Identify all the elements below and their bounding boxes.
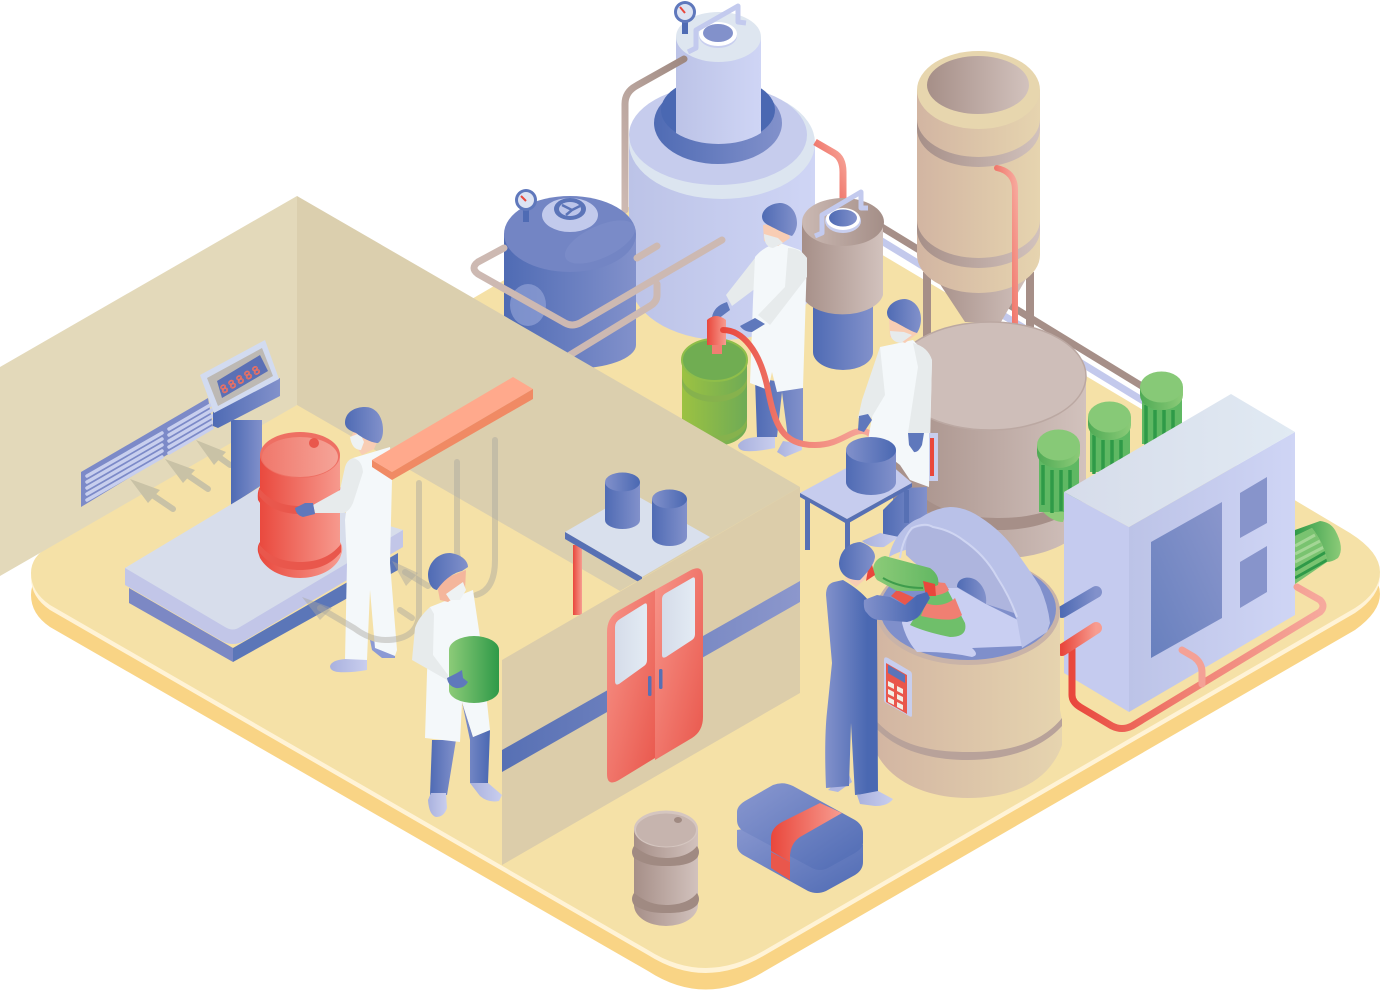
back arm bbox=[726, 258, 760, 306]
lower blue cylinder bbox=[813, 290, 873, 370]
brown body bbox=[802, 222, 883, 314]
shoe bbox=[857, 791, 893, 806]
floor pipework bbox=[1062, 587, 1323, 728]
tank body bbox=[629, 143, 815, 340]
big window bbox=[1151, 502, 1222, 658]
bench with blue cylinder bbox=[800, 437, 912, 552]
right face bbox=[1129, 432, 1295, 712]
tank top bbox=[629, 85, 807, 185]
silo legs bbox=[923, 272, 1034, 344]
display bbox=[200, 340, 279, 413]
head bbox=[762, 203, 797, 248]
worker pumping bbox=[707, 203, 873, 457]
front wall bbox=[502, 487, 800, 865]
back arm bbox=[858, 347, 885, 420]
blue tank bbox=[504, 189, 641, 369]
left leaf bbox=[607, 590, 655, 782]
coat bbox=[425, 590, 490, 742]
head bbox=[839, 542, 875, 587]
green container bbox=[449, 636, 499, 703]
hatch bbox=[825, 209, 861, 233]
scale head bbox=[213, 378, 280, 428]
shoe bbox=[330, 659, 367, 672]
upper green bbox=[873, 556, 938, 591]
red inlet pipe bbox=[1062, 628, 1096, 650]
knot bbox=[923, 581, 936, 596]
pipes behind tanks bbox=[880, 226, 1145, 402]
worker with drum bbox=[295, 407, 397, 672]
main hot pipe bbox=[1072, 587, 1323, 728]
glove bbox=[295, 503, 315, 517]
legs bbox=[755, 378, 803, 443]
control keypad bbox=[884, 657, 912, 717]
wall panel bbox=[929, 433, 938, 481]
upper cylinder bbox=[676, 37, 761, 144]
ghost pipes on wall bbox=[302, 440, 495, 640]
suit bbox=[345, 447, 397, 660]
door bbox=[607, 568, 703, 782]
brown feed pipe bbox=[625, 59, 684, 210]
mixing vat bbox=[873, 507, 1062, 798]
large lavender reactor tank bbox=[629, 1, 815, 340]
lower green bbox=[910, 585, 965, 637]
big brown tank bbox=[893, 322, 1086, 558]
shoes bbox=[428, 793, 447, 817]
plate top bbox=[125, 487, 403, 630]
green barrel bbox=[682, 339, 747, 446]
gloves bbox=[712, 302, 730, 319]
silo cone bbox=[932, 272, 1030, 322]
worker in blue suit bbox=[825, 542, 930, 806]
glove bbox=[447, 670, 468, 688]
control cabinet bbox=[1064, 394, 1295, 712]
arm bbox=[864, 592, 930, 622]
lower strap bbox=[771, 852, 790, 880]
rear shoe bbox=[370, 640, 395, 658]
coat bbox=[750, 243, 807, 392]
silo rim bbox=[917, 51, 1040, 129]
wrapped bale bbox=[737, 783, 863, 893]
airflow arrows bbox=[130, 440, 230, 509]
small windows bbox=[1240, 477, 1267, 538]
head bbox=[428, 553, 468, 602]
branch pipe bbox=[1182, 650, 1202, 684]
coat bbox=[868, 340, 932, 487]
legs bbox=[805, 500, 810, 550]
arm bbox=[313, 458, 363, 513]
head bbox=[887, 299, 921, 343]
body bbox=[504, 234, 636, 369]
silo red pipe bbox=[997, 168, 1015, 325]
orange beam bbox=[372, 377, 533, 480]
lower block bbox=[737, 820, 863, 893]
suit bbox=[825, 580, 878, 795]
strap bbox=[771, 803, 842, 862]
left face bbox=[1064, 492, 1129, 712]
shoes bbox=[738, 437, 775, 451]
porthole bbox=[510, 284, 546, 326]
arm bbox=[412, 607, 448, 680]
mixer paste bbox=[902, 588, 1022, 657]
motor 3 bbox=[1140, 372, 1183, 445]
back-left wall bbox=[0, 196, 297, 576]
top bbox=[1064, 394, 1295, 527]
red drum bbox=[258, 432, 342, 578]
door windows bbox=[615, 603, 647, 685]
silo bbox=[917, 51, 1040, 344]
pipes around blue tank bbox=[474, 240, 722, 355]
scale column bbox=[231, 420, 262, 505]
right end motor bbox=[1295, 521, 1341, 584]
handle bbox=[815, 192, 868, 236]
plate side bbox=[125, 530, 403, 644]
green and red bag bbox=[873, 556, 965, 637]
ring opening bbox=[654, 82, 782, 164]
gloves bbox=[858, 414, 872, 432]
blue cylinder bbox=[846, 450, 896, 495]
pump bbox=[707, 316, 726, 354]
worker at bench bbox=[858, 299, 938, 547]
pressure gauge bbox=[674, 1, 696, 34]
shoe bbox=[862, 533, 899, 547]
wall stripe bbox=[502, 581, 800, 772]
legs bbox=[883, 487, 927, 538]
floor scale bbox=[125, 340, 403, 662]
handle bbox=[688, 6, 746, 52]
right leaf bbox=[655, 568, 703, 760]
back-right wall bbox=[297, 196, 800, 591]
door handles bbox=[648, 676, 652, 696]
hatch bbox=[699, 24, 737, 48]
silo bands bbox=[917, 119, 1040, 167]
tank rim band bbox=[629, 87, 815, 199]
head bbox=[345, 407, 383, 455]
mixer lid bbox=[889, 507, 1050, 648]
vat body bbox=[873, 610, 1062, 798]
rear shoe bbox=[828, 772, 852, 792]
blue pipe bbox=[1062, 592, 1096, 612]
front arm bbox=[908, 343, 932, 433]
side table with cylinders bbox=[565, 472, 710, 615]
vat interior bbox=[876, 557, 1060, 665]
wall vent bbox=[81, 398, 213, 507]
red bands bbox=[921, 598, 962, 620]
cylinder one bbox=[605, 472, 640, 529]
small brown tank bbox=[802, 192, 884, 370]
highlight bbox=[559, 211, 641, 273]
cylinder two bbox=[652, 490, 687, 546]
base bbox=[129, 588, 233, 662]
brown barrel bbox=[632, 810, 699, 926]
motor 2 bbox=[1088, 402, 1131, 474]
motor 1 bbox=[1037, 430, 1080, 522]
front arm bbox=[758, 248, 807, 325]
hose bbox=[723, 330, 873, 445]
hatch bbox=[542, 198, 598, 232]
legs bbox=[430, 740, 456, 795]
top bbox=[565, 493, 710, 577]
top bbox=[504, 196, 636, 272]
upper block bbox=[737, 783, 863, 870]
green motors row bbox=[1037, 372, 1183, 522]
top bbox=[800, 452, 912, 519]
vat band bbox=[874, 718, 1062, 760]
silo body bbox=[917, 90, 1040, 293]
red feed pipe bbox=[815, 142, 843, 202]
brown top bbox=[802, 198, 884, 246]
display: 88888 bbox=[218, 363, 263, 397]
gauge bbox=[515, 189, 537, 222]
worker carrying container bbox=[412, 553, 502, 817]
leg bbox=[573, 545, 582, 615]
